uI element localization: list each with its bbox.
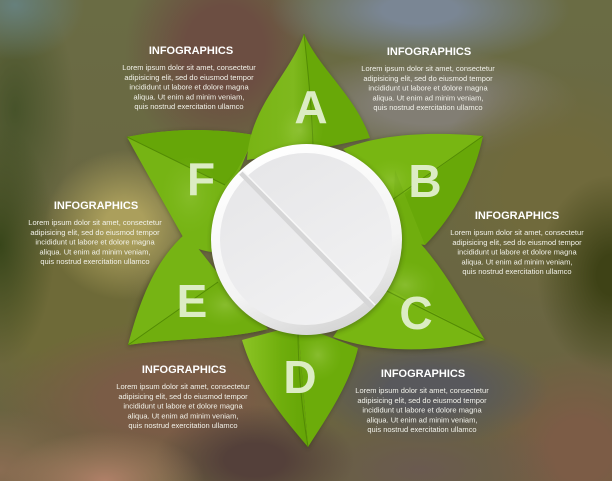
text block: lower right bbox=[355, 368, 489, 434]
text block: top left: INFOGRAPHICS bbox=[149, 45, 233, 57]
text block: top left bbox=[122, 45, 256, 111]
letter D: D bbox=[283, 351, 317, 403]
text block: right: INFOGRAPHICS bbox=[475, 210, 559, 222]
letter B: B bbox=[408, 155, 442, 207]
text block: top left: adipisicing elit, sed do eiusmod tempor bbox=[124, 73, 254, 82]
text block: top right: aliqua. Ut enim ad minim veniam, bbox=[373, 94, 483, 102]
tablet bbox=[211, 144, 403, 337]
leaf B bbox=[343, 134, 483, 245]
score line bbox=[241, 171, 375, 307]
text block: lower left: quis nostrud exercitation ullamco bbox=[128, 421, 238, 430]
text block: top right: incididunt ut labore et dolore magna bbox=[368, 84, 488, 92]
text block: top left: quis nostrud exercitation ullamco bbox=[134, 102, 244, 111]
text block: right: quis nostrud exercitation ullamco bbox=[462, 267, 572, 276]
text block: right: Lorem ipsum dolor sit amet, consectetur bbox=[450, 228, 584, 237]
text block: left: Lorem ipsum dolor sit amet, consectetur bbox=[28, 218, 162, 227]
text block: lower right: adipisicing elit, sed do eiusmod tempor bbox=[357, 396, 487, 405]
text block: top right: Lorem ipsum dolor sit amet, consectetur bbox=[361, 64, 495, 73]
leaf flower bbox=[127, 34, 485, 449]
text block: right: adipisicing elit, sed do eiusmod tempor bbox=[452, 238, 582, 247]
text block: right bbox=[450, 210, 584, 276]
text block: lower right: quis nostrud exercitation ullamco bbox=[367, 425, 477, 434]
text block: left: quis nostrud exercitation ullamco bbox=[40, 257, 150, 266]
leaf F bbox=[127, 130, 254, 252]
text block: lower right: aliqua. Ut enim ad minim veniam, bbox=[367, 416, 477, 424]
tablet face bbox=[220, 153, 392, 325]
text block: right: aliqua. Ut enim ad minim veniam, bbox=[462, 258, 572, 266]
text block: top left: Lorem ipsum dolor sit amet, consectetur bbox=[122, 63, 256, 72]
text block: top right bbox=[361, 46, 495, 112]
text block: lower left: INFOGRAPHICS bbox=[142, 364, 226, 376]
text block: lower right: INFOGRAPHICS bbox=[381, 368, 465, 380]
text block: left: adipisicing elit, sed do eiusmod tempor bbox=[30, 228, 160, 237]
leaf shadow bbox=[127, 36, 485, 449]
tablet rim bbox=[211, 144, 402, 335]
text block: lower right: Lorem ipsum dolor sit amet, consectetur bbox=[355, 386, 489, 395]
leaf D bbox=[242, 325, 358, 447]
text block: right: incididunt ut labore et dolore magna bbox=[457, 248, 577, 256]
leaf C bbox=[333, 230, 485, 349]
text block: top right: INFOGRAPHICS bbox=[387, 46, 471, 58]
leaf A bbox=[247, 34, 370, 160]
text block: top right: quis nostrud exercitation ullamco bbox=[373, 103, 483, 112]
letter F: F bbox=[187, 153, 215, 205]
letter C: C bbox=[399, 287, 433, 339]
text block: left: aliqua. Ut enim ad minim veniam, bbox=[40, 248, 150, 256]
text block: lower left: aliqua. Ut enim ad minim veniam, bbox=[128, 412, 238, 420]
text block: left: incididunt ut labore et dolore magna bbox=[35, 238, 155, 246]
text block: top left: incididunt ut labore et dolore magna bbox=[129, 82, 249, 92]
text block: lower left: Lorem ipsum dolor sit amet, consectetur bbox=[116, 382, 250, 391]
text block: lower left: incididunt ut labore et dolore magna bbox=[123, 402, 243, 410]
text block: lower left: adipisicing elit, sed do eiusmod tempor bbox=[118, 392, 248, 401]
text block: lower right: incididunt ut labore et dolore magna bbox=[362, 406, 482, 414]
text block: left bbox=[28, 200, 162, 266]
letter A: A bbox=[294, 81, 328, 133]
text block: lower left bbox=[116, 364, 250, 430]
leaf E bbox=[128, 233, 268, 345]
text block: top left: aliqua. Ut enim ad minim veniam, bbox=[134, 92, 244, 102]
letter E: E bbox=[177, 275, 207, 327]
text block: left: INFOGRAPHICS bbox=[54, 200, 138, 212]
text block: top right: adipisicing elit, sed do eiusmod tempor bbox=[363, 74, 493, 83]
